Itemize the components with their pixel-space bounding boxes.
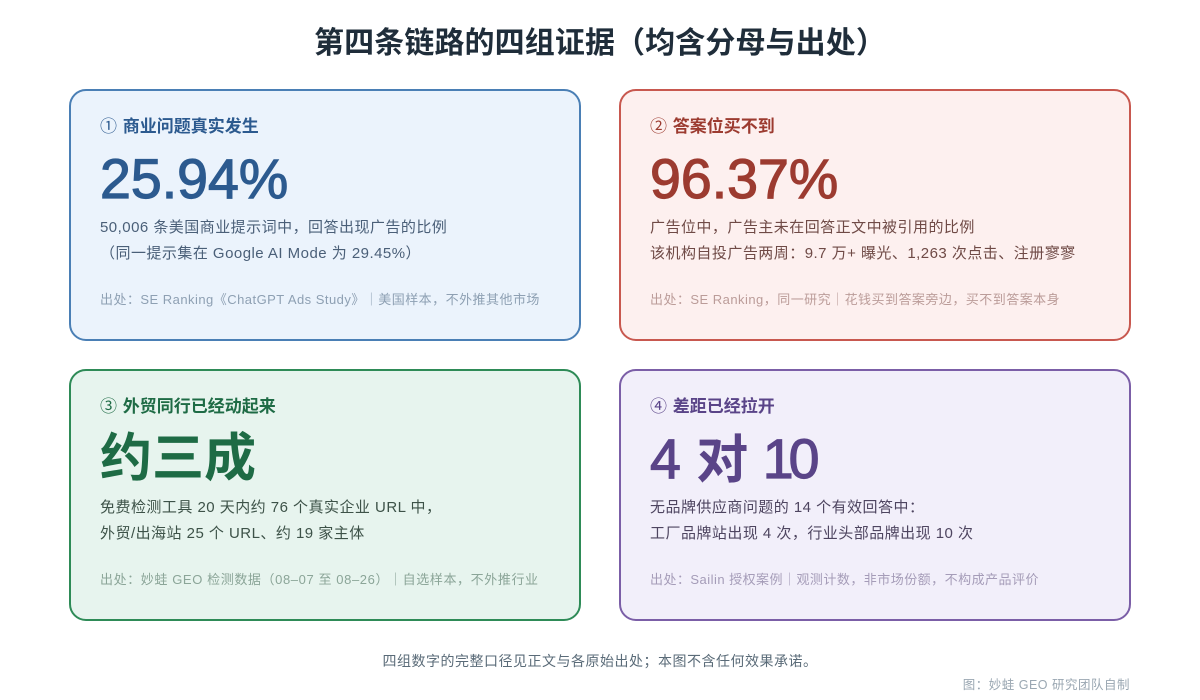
panel: commercial questions <box>69 89 581 341</box>
description: answer slot <box>650 219 1076 262</box>
panel: gap has widened <box>619 369 1131 621</box>
heading: gap has widened: ④ 差距已经拉开 <box>650 397 775 416</box>
source: commercial questions: 出处：SE Ranking《ChatGPT Ads Study》｜美国样本，不外推其他市场 <box>100 292 540 307</box>
description: answer slot: 广告位中，广告主未在回答正文中被引用的比例 <box>650 219 975 236</box>
description: gap has widened: 工厂品牌站出现 4 次，行业头部品牌出现 10 次 <box>650 525 973 542</box>
description: foreign trade peers <box>100 499 441 542</box>
description: commercial questions: （同一提示集在 Google AI Mode 为 29.45%） <box>100 245 421 262</box>
title: 第四条链路的四组证据（均含分母与出处） <box>314 27 886 60</box>
big number: 96.37%: 96.37% <box>650 148 838 210</box>
heading: foreign trade peers: ③ 外贸同行已经动起来 <box>100 397 276 416</box>
big number: 4 vs 10: 4 对 10 <box>650 428 819 490</box>
description: gap has widened <box>650 499 973 542</box>
description: foreign trade peers: 免费检测工具 20 天内约 76 个真实企业 URL 中， <box>100 499 441 516</box>
description: answer slot: 该机构自投广告两周：9.7 万+ 曝光、1,263 次点击、注册寥寥 <box>650 245 1076 262</box>
big number: about thirty percent: 约三成 <box>100 430 256 488</box>
description: commercial questions <box>100 219 447 262</box>
panel: answer slot cannot be bought <box>619 89 1131 341</box>
description: foreign trade peers: 外贸/出海站 25 个 URL、约 19 家主体 <box>100 525 365 542</box>
credit: 图：妙蛙 GEO 研究团队自制 <box>963 678 1130 692</box>
footnote: 四组数字的完整口径见正文与各原始出处；本图不含任何效果承诺。 <box>382 653 818 669</box>
heading: commercial questions: ① 商业问题真实发生 <box>100 117 259 136</box>
panel: foreign trade peers <box>69 369 581 621</box>
source: answer slot: 出处：SE Ranking，同一研究｜花钱买到答案旁边，买不到答案本身 <box>650 292 1060 307</box>
description: gap has widened: 无品牌供应商问题的 14 个有效回答中： <box>650 499 924 516</box>
description: commercial questions: 50,006 条美国商业提示词中，回答出现广告的比例 <box>100 219 447 236</box>
big number: 25.94%: 25.94% <box>100 148 288 210</box>
source: foreign trade peers: 出处：妙蛙 GEO 检测数据（08–07 至 08–26）｜自选样本，不外推行业 <box>100 572 539 587</box>
heading: answer slot: ② 答案位买不到 <box>650 117 775 136</box>
source: gap has widened: 出处：Sailin 授权案例｜观测计数，非市场份额，不构成产品评价 <box>650 572 1039 587</box>
